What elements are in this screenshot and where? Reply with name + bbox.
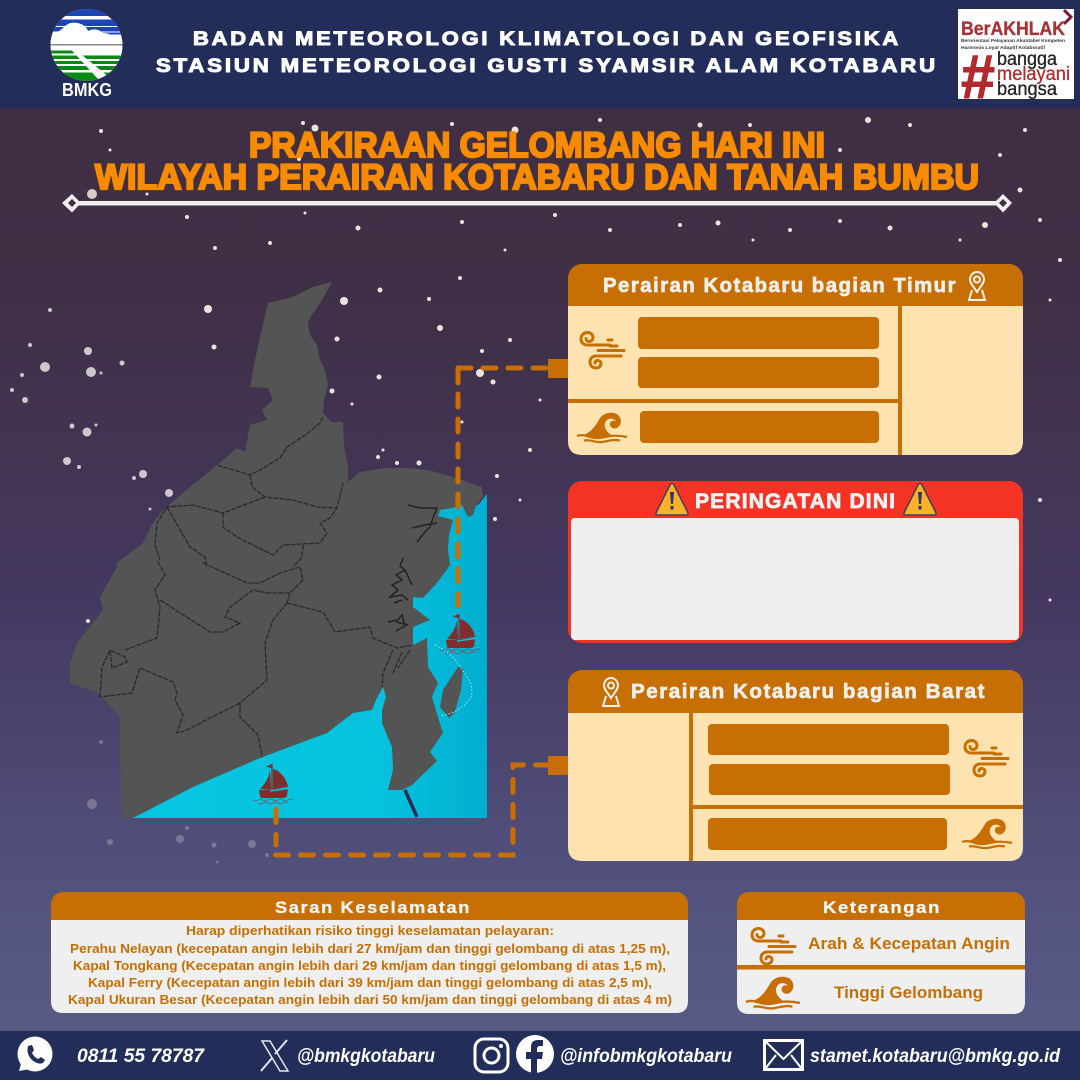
icon: wind legend [752,928,795,964]
icon: pin [603,678,619,706]
BMKG logo: BMKG [62,80,112,100]
faint stars [10,308,269,864]
safety text: Perahu Nelayan (kecepatan angin lebih dari 27 km/jam dan tinggi gelombang di atas 1,25 m), [70,941,670,956]
icon: wind [581,332,624,368]
title divider [62,194,1012,212]
panel: saran keselamatan [51,892,688,1013]
icon: wave [962,819,1012,848]
BerAKHLAK logo: melayani [997,64,1070,85]
panel: peringatan dini [568,481,1023,643]
x handle: @bmkgkotabaru [297,1046,435,1067]
safety text: Kapal Ferry (Kecepatan angin lebih dari 39 km/jam dan tinggi gelombang di atas 2,5 m), [88,975,652,990]
legend label: wave: Tinggi Gelombang [834,983,983,1002]
icon: warning right [904,484,936,515]
safety text: Kapal Ukuran Besar (Kecepatan angin lebih dari 50 km/jam dan tinggi gelombang di atas 4 m) [68,992,672,1007]
safety text [68,923,672,1007]
header bar [0,0,1080,112]
email: stamet.kotabaru@bmkg.go.id [810,1046,1060,1067]
icon: facebook [516,1035,554,1073]
connector: barat [276,756,568,855]
dotted route around the island [435,645,472,716]
heading: Perairan Kotabaru bagian Timur [603,275,957,297]
connector: timur [458,359,568,606]
panel: keterangan [737,892,1025,1014]
icon: wind [965,740,1008,776]
main title: PRAKIRAAN GELOMBANG HARI INI [249,126,825,165]
shipping line [405,790,417,817]
icon: wave legend [746,977,800,1008]
heading: Perairan Kotabaru bagian Barat [631,681,986,703]
facebook handle: @infobmkgkotabaru [560,1046,732,1067]
icon: instagram [475,1039,508,1072]
heading: Keterangan [823,899,941,917]
BerAKHLAK logo: # [961,43,995,112]
boat: barat [253,764,293,804]
land: Kalimantan Selatan [70,282,483,818]
BerAKHLAK logo: Harmonis Loyal Adaptif Kolaboratif [961,45,1046,50]
BMKG logo [50,9,122,96]
rivers [388,505,437,631]
Pulau Sebuku [440,667,463,718]
background stars [86,117,1062,623]
heading: Saran Keselamatan [275,899,471,917]
safety text: Kapal Tongkang (Kecepatan angin lebih dari 29 km/jam dan tinggi gelombang di atas 1,5 m), [73,958,666,973]
icon: pin [969,272,985,300]
BerAKHLAK logo: Berorientasi Pelayanan Akuntabel Kompeten [961,38,1065,43]
BerAKHLAK logo: bangga [997,49,1057,70]
main title: WILAYAH PERAIRAN KOTABARU DAN TANAH BUMBU [95,158,979,197]
sea area [130,494,487,818]
panel: perairan kotabaru bagian barat [568,670,1023,861]
header title: BADAN METEOROLOGI KLIMATOLOGI DAN GEOFISIKA [193,28,901,50]
boat: timur [440,614,480,654]
main title [95,126,979,197]
icon: whatsapp [18,1036,52,1072]
header title [156,28,938,77]
icon: warning left [656,484,688,515]
internal district boundaries [100,417,413,757]
phone number: 0811 55 78787 [77,1046,205,1067]
map [70,282,487,818]
icon: wave [577,413,627,442]
footer bar [0,1031,1080,1080]
header title: STASIUN METEOROLOGI GUSTI SYAMSIR ALAM KOTABARU [156,55,938,77]
heading: PERINGATAN DINI [695,490,895,513]
icon: envelope [764,1040,802,1070]
BerAKHLAK logo [958,9,1074,112]
safety text: Harap diperhatikan risiko tinggi keselamatan pelayaran: [186,923,554,938]
icon: x [261,1040,288,1071]
BerAKHLAK logo: BerAKHLAK [961,19,1065,40]
legend label: wind: Arah & Kecepatan Angin [808,934,1010,953]
panel: perairan kotabaru bagian timur [568,264,1023,455]
BerAKHLAK logo: bangsa [997,79,1057,100]
